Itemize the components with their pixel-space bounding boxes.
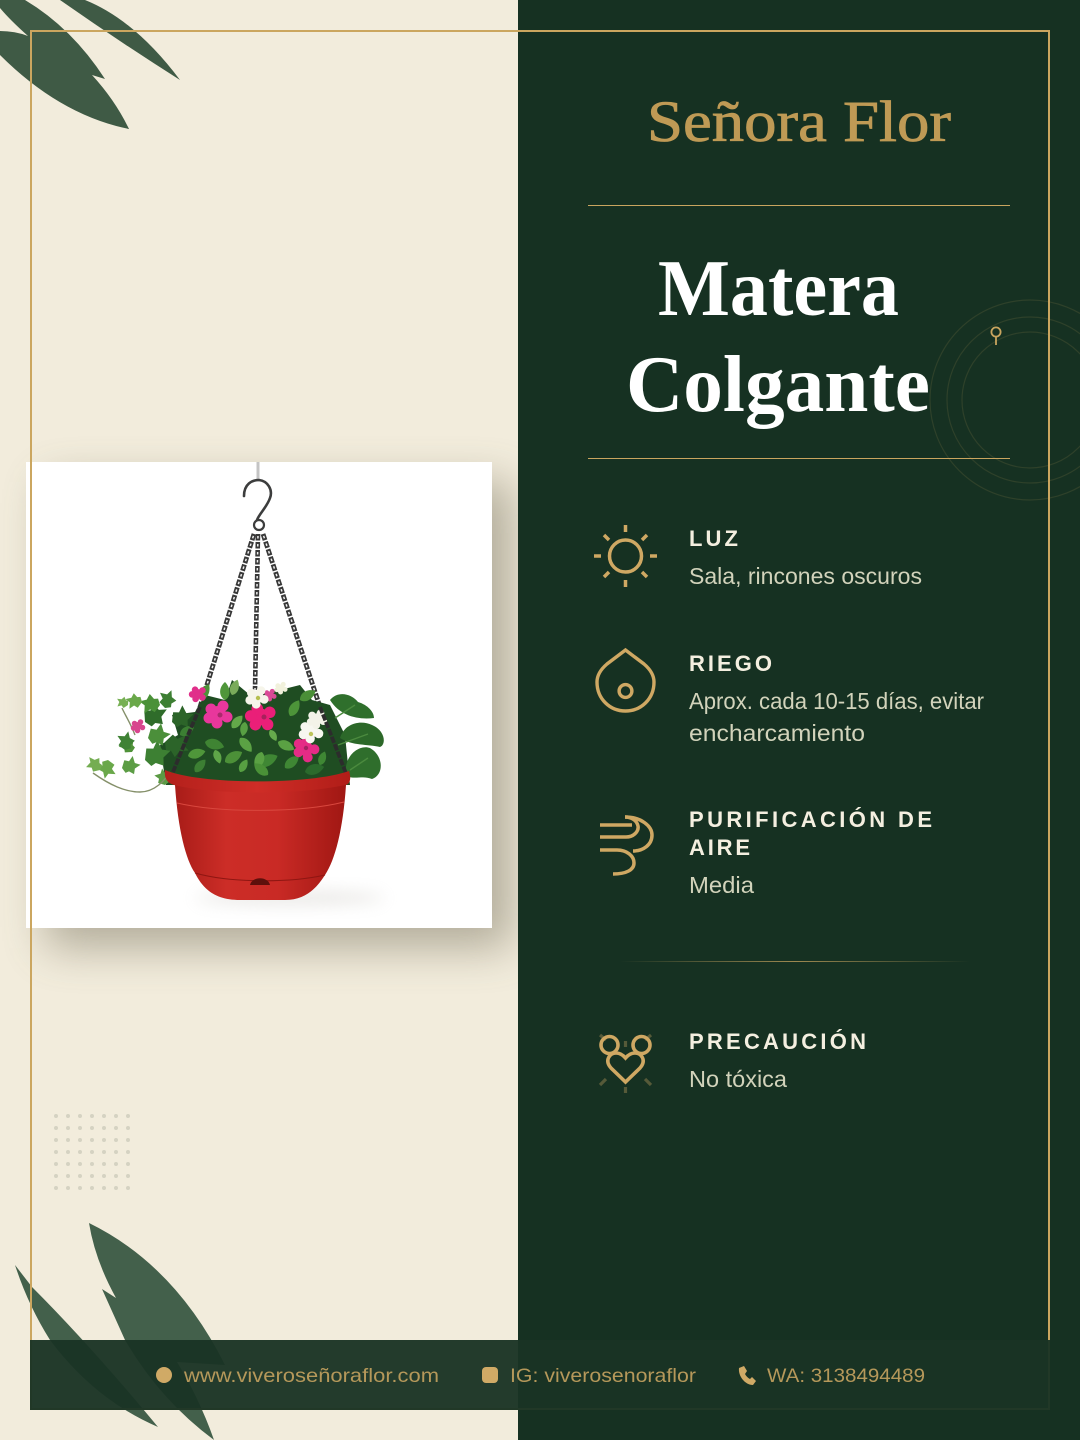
item: purificación de aire (600, 807, 932, 898)
website: www.viveroseñoraflor.com (183, 1365, 439, 1387)
icon: instagram square (482, 1367, 498, 1383)
pot ground shadow (195, 891, 385, 905)
decorative rings (930, 300, 1080, 500)
value: riego (689, 688, 984, 746)
label: purificación de aire: AIRE (689, 835, 750, 860)
brand name: Señora Flor (647, 89, 951, 154)
decorative leaves: bottom left (15, 1223, 225, 1440)
icon: heart with rays (600, 1035, 651, 1093)
item: riego (597, 650, 984, 746)
instagram handle: IG: viverosenoraflor (510, 1365, 697, 1387)
icon: phone (739, 1366, 756, 1385)
footer bar (30, 1340, 1050, 1410)
product title: Matera (658, 245, 899, 333)
foliage (82, 678, 384, 792)
hook and chains (173, 462, 347, 776)
icon: sun (594, 525, 657, 587)
label: purificación de aire (689, 807, 932, 860)
icon: water drop (597, 650, 654, 711)
product title (626, 245, 930, 429)
item: luz (594, 525, 922, 589)
section divider (620, 961, 970, 962)
label: luz: LUZ (689, 526, 738, 551)
label: riego: RIEGO (689, 651, 772, 676)
top divider (588, 205, 1010, 206)
value: riego: Aprox. cada 10-15 días, evitar (689, 688, 984, 714)
chain over foliage (173, 707, 347, 776)
label: purificación de aire: PURIFICACIÓN DE (689, 807, 932, 832)
decorative leaves: top left (0, 0, 180, 129)
value: riego: encharcamiento (689, 720, 865, 746)
item: precaución (600, 1029, 866, 1093)
product title: Colgante (626, 341, 930, 429)
value: luz: Sala, rincones oscuros (689, 563, 922, 589)
icon: web dot (156, 1367, 172, 1383)
product photo: hanging pot (26, 462, 492, 928)
petunia flowers (131, 682, 327, 767)
value: purificación de aire: Media (689, 872, 754, 898)
dot pattern (54, 1114, 130, 1190)
value: precaución: No tóxica (689, 1066, 787, 1092)
image shadow (46, 482, 512, 948)
icon: wind (600, 817, 652, 874)
label: precaución: PRECAUCIÓN (689, 1029, 866, 1054)
pot body (175, 785, 346, 900)
cream background panel (0, 0, 518, 1440)
decorative pin (991, 327, 1001, 345)
dark right panel (518, 0, 1080, 1440)
phone number: WA: 3138494489 (767, 1365, 925, 1387)
pot rim (165, 770, 350, 792)
title divider (588, 458, 1010, 459)
